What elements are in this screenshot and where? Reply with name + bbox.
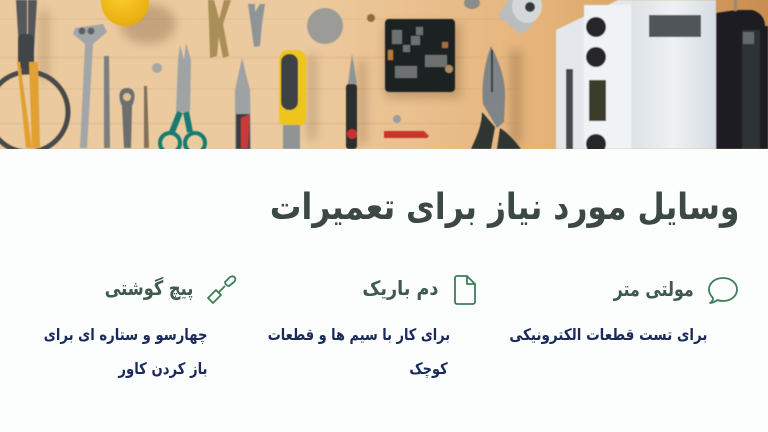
icon: scissors with orange grip [0, 0, 68, 152]
icon: red bar [384, 115, 429, 138]
description: screwdriver [43, 325, 207, 378]
icon: screwdriver link [207, 275, 236, 304]
icon: document [454, 275, 476, 305]
hero photo: repair tools on a wooden table [0, 0, 768, 149]
description: needle-nose pliers: کوچک [409, 359, 448, 378]
column: needle-nose pliers [268, 275, 476, 378]
icon: speech bubble [708, 277, 738, 304]
icon: long pliers [73, 24, 107, 148]
icon: ball and pliers at top [101, 0, 375, 58]
icon: teal scissors [160, 43, 205, 153]
icon: red-handled cutter [235, 58, 251, 150]
title: وسایل مورد نیاز برای تعمیرات [269, 187, 739, 228]
description: multimeter: برای تست قطعات الکترونیکی [509, 325, 707, 344]
column: screwdriver [43, 275, 236, 378]
description: needle-nose pliers [268, 325, 450, 378]
description: screwdriver: چهارسو و ستاره ای برای [43, 325, 207, 344]
icon: yellow screwdriver [279, 50, 306, 149]
description: needle-nose pliers: برای کار با سیم ها و قطعات [268, 325, 450, 344]
icon: white device with knobs [556, 0, 716, 154]
description: screwdriver: باز کردن کاور [118, 359, 207, 378]
heading: screwdriver: پیچ گوشتی [104, 276, 193, 300]
icon: steel cylinder [464, 0, 542, 34]
heading: multimeter: مولتی متر [614, 277, 694, 301]
column: multimeter [509, 277, 738, 344]
heading: needle-nose pliers: دم باریک [362, 276, 438, 300]
icon: slim tools [104, 56, 162, 148]
icon: circuit board [385, 19, 455, 92]
icon: large pliers [471, 46, 521, 149]
icon: black cutter [346, 54, 357, 149]
icon: black device [716, 0, 768, 149]
